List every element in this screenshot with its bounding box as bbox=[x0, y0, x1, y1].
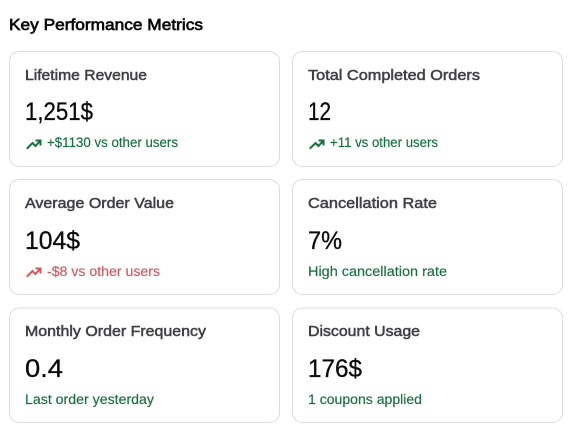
label: cancellation rate: Cancellation Rate bbox=[308, 196, 437, 212]
note: monthly order frequency: Last order yesterday bbox=[25, 392, 154, 407]
label: discount usage: Discount Usage bbox=[308, 324, 420, 340]
icon: trending up red bbox=[28, 268, 40, 276]
panel: cancellation rate bbox=[292, 180, 562, 294]
panel: lifetime revenue bbox=[10, 52, 280, 166]
note: cancellation rate: High cancellation rate bbox=[308, 264, 447, 279]
comparison: total completed orders: +11 vs other users bbox=[330, 135, 438, 150]
label: monthly order frequency: Monthly Order Frequency bbox=[25, 324, 207, 340]
value: average order value: 104$ bbox=[25, 227, 80, 255]
label: total completed orders: Total Completed Orders bbox=[308, 68, 480, 84]
icon: trending up green bbox=[310, 140, 324, 148]
icon: trending up green bbox=[28, 140, 40, 148]
label: lifetime revenue: Lifetime Revenue bbox=[25, 68, 147, 84]
panel: average order value bbox=[10, 180, 280, 294]
panel: monthly order frequency bbox=[10, 308, 280, 422]
value: total completed orders: 12 bbox=[308, 98, 331, 126]
value: lifetime revenue: 1,251$ bbox=[25, 98, 93, 126]
title: Key Performance Metrics bbox=[9, 17, 203, 34]
label: average order value: Average Order Value bbox=[25, 196, 174, 212]
comparison: lifetime revenue: +$1130 vs other users bbox=[47, 135, 178, 150]
value: discount usage: 176$ bbox=[308, 355, 362, 383]
note: discount usage: 1 coupons applied bbox=[308, 392, 422, 407]
value: monthly order frequency: 0.4 bbox=[25, 355, 63, 383]
panel: discount usage bbox=[292, 308, 562, 422]
panel: total completed orders bbox=[292, 52, 562, 166]
value: cancellation rate: 7% bbox=[308, 227, 342, 255]
comparison: average order value: -$8 vs other users bbox=[47, 264, 160, 279]
